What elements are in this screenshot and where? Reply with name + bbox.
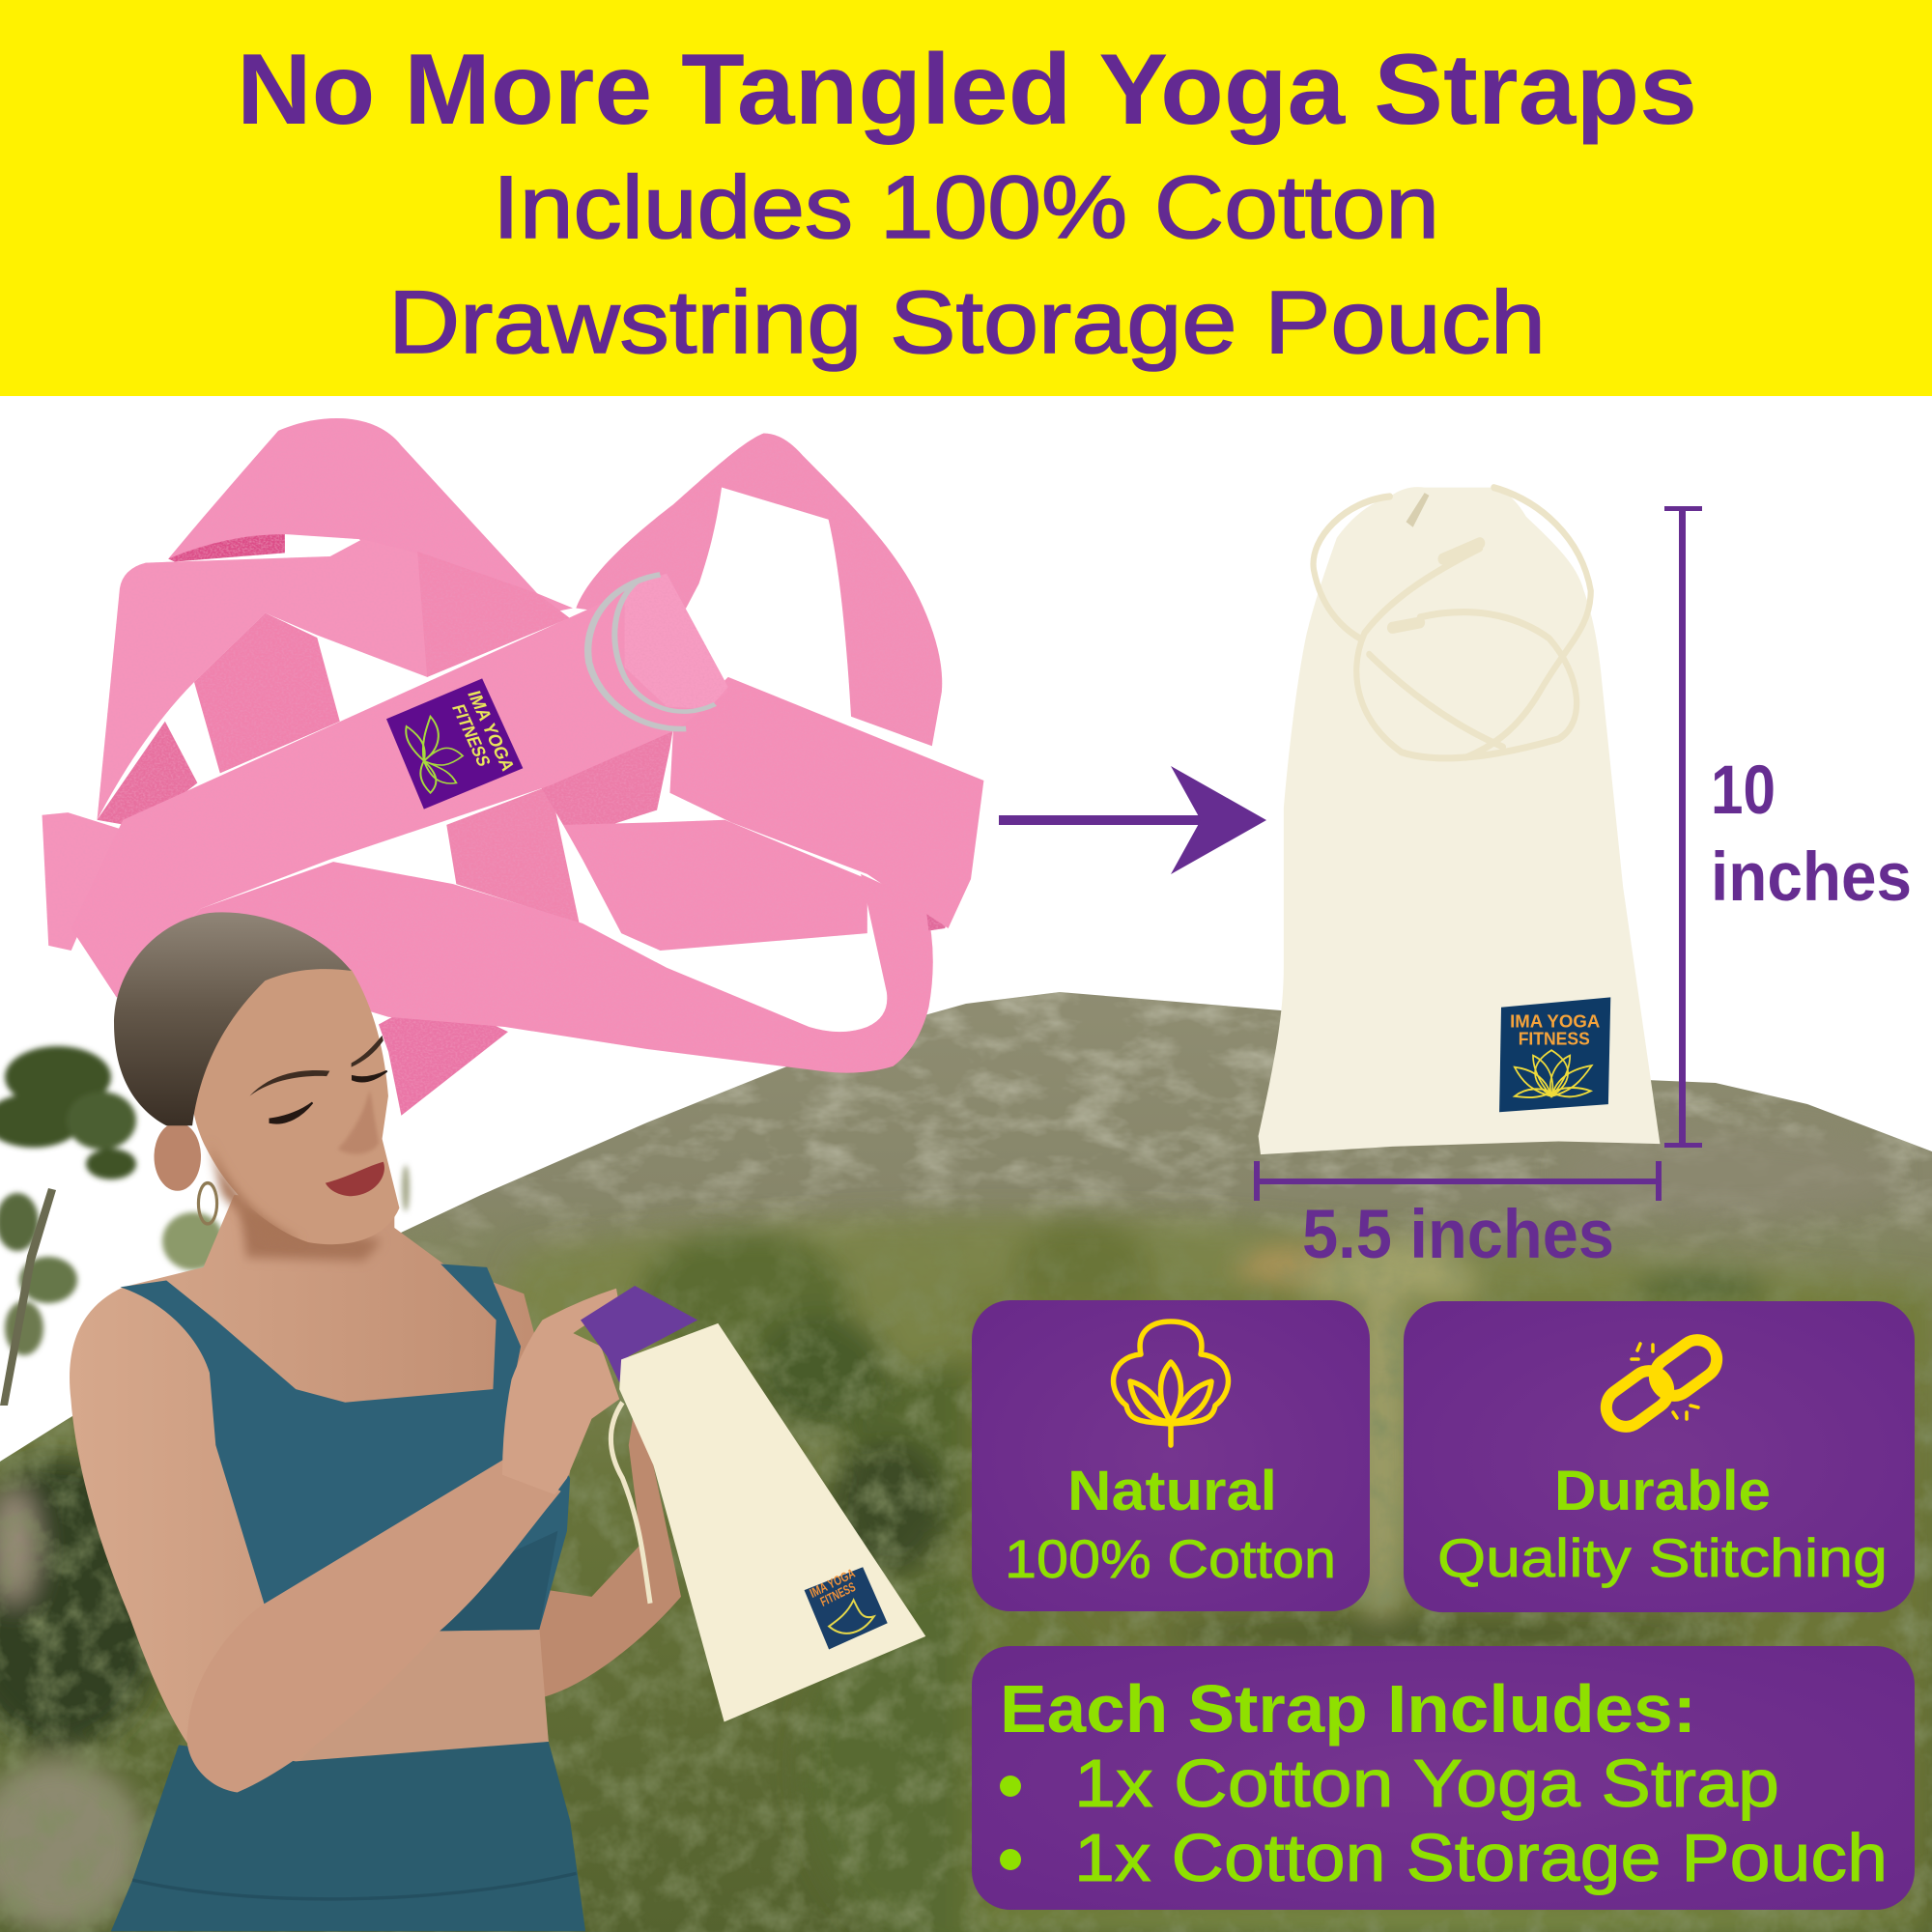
pouch lotus	[1515, 1050, 1592, 1097]
yoga strap folded	[43, 418, 983, 1116]
strap: under piece	[537, 728, 673, 830]
pouch label text: IMA YOGA	[808, 1565, 858, 1601]
eye left	[270, 1102, 312, 1123]
strap: main diagonal band	[71, 574, 728, 997]
woman holding pouch	[70, 912, 925, 1931]
sports bra	[120, 1264, 570, 1631]
storage pouch	[1259, 487, 1660, 1154]
strap: top right loop	[576, 433, 942, 746]
subtitle line one: Includes 100% Cotton	[493, 158, 1439, 257]
face shadow	[210, 1142, 302, 1241]
background: left tree	[0, 1046, 410, 1406]
label: inches: inches	[1711, 839, 1912, 916]
background: sky	[0, 396, 1932, 1932]
strap hardware and label	[386, 575, 715, 810]
pouch label text second line: FITNESS	[818, 1579, 858, 1609]
strap: fold crease	[417, 552, 570, 677]
face	[191, 966, 399, 1244]
width dimension line	[1254, 1161, 1662, 1201]
cotton subheading: 100% Cotton	[1005, 1528, 1336, 1589]
durable heading: Durable	[1554, 1460, 1771, 1522]
arrow	[999, 766, 1266, 874]
strap: fold at ring	[625, 574, 728, 709]
label: 10: 10	[1711, 753, 1776, 829]
hair	[114, 912, 352, 1125]
banner: header	[0, 0, 1932, 396]
drawstring	[1314, 488, 1591, 758]
lotus	[406, 717, 463, 793]
background: mountain and hillside	[0, 985, 1932, 1932]
ear	[155, 1122, 201, 1191]
strap: end tab	[43, 812, 123, 951]
title: No More Tangled Yoga Straps	[237, 34, 1697, 146]
strap: middle vertical	[446, 785, 580, 923]
item one: 1x Cotton Yoga Strap	[1074, 1746, 1779, 1821]
strap: right band	[669, 677, 983, 928]
far arm	[536, 1406, 681, 1699]
includes heading: Each Strap Includes:	[1000, 1671, 1696, 1747]
label: 5.5 inches: 5.5 inches	[1302, 1197, 1614, 1273]
strap: hanging piece	[379, 1012, 508, 1116]
strap: bottom long band	[117, 862, 933, 1073]
bullet two	[1000, 1849, 1021, 1870]
label text second line: FITNESS	[447, 702, 494, 768]
panel: natural cotton	[972, 1300, 1370, 1611]
strap: left dark piece	[97, 722, 197, 827]
pouch body	[1259, 487, 1660, 1154]
item two: 1x Cotton Storage Pouch	[1074, 1820, 1888, 1895]
nose	[338, 1090, 379, 1154]
brand label on strap	[386, 678, 523, 810]
body skin	[70, 1195, 570, 1788]
pouch lotus	[829, 1600, 874, 1634]
neck shadow	[241, 1208, 383, 1261]
panel: durable stitching	[1404, 1301, 1915, 1612]
panel: each strap includes	[972, 1646, 1915, 1910]
pouch with label	[619, 1323, 925, 1721]
eyebrow	[249, 1070, 329, 1096]
strap: top left loop	[168, 418, 573, 633]
midriff tone	[296, 1627, 549, 1765]
icon: chain link	[1599, 1332, 1724, 1435]
eyebrow right	[352, 1036, 384, 1067]
hand	[502, 1289, 619, 1494]
pouch label	[1499, 997, 1610, 1112]
leggings	[111, 1742, 585, 1931]
pouch label text: IMA YOGA	[1510, 1011, 1601, 1032]
stitching subheading: Quality Stitching	[1437, 1527, 1888, 1588]
drawstring	[611, 1403, 650, 1604]
head	[114, 912, 399, 1244]
d-ring	[588, 575, 715, 729]
height dimension line	[1664, 506, 1702, 1148]
earring	[198, 1183, 217, 1224]
strap: lower right band	[563, 820, 867, 951]
bra band shade	[438, 1531, 557, 1631]
lips	[326, 1162, 384, 1196]
strap: vertical piece	[194, 613, 340, 773]
bullet one	[1000, 1776, 1021, 1797]
waistband line	[132, 1873, 577, 1899]
strap: left fold	[97, 539, 570, 820]
strap: right edge shadow	[925, 904, 949, 931]
pouch label	[805, 1567, 888, 1649]
strap: inner shadow	[168, 534, 285, 562]
natural heading: Natural	[1067, 1460, 1277, 1522]
label text: IMA YOGA	[463, 689, 518, 773]
icon: cotton	[1114, 1321, 1228, 1445]
pouch label text second line: FITNESS	[1519, 1029, 1590, 1049]
pouch shading	[1406, 493, 1429, 527]
purple rolled strap	[581, 1286, 697, 1382]
subtitle line two: Drawstring Storage Pouch	[388, 273, 1546, 372]
eye right	[353, 1071, 387, 1081]
forearm	[187, 1459, 561, 1792]
